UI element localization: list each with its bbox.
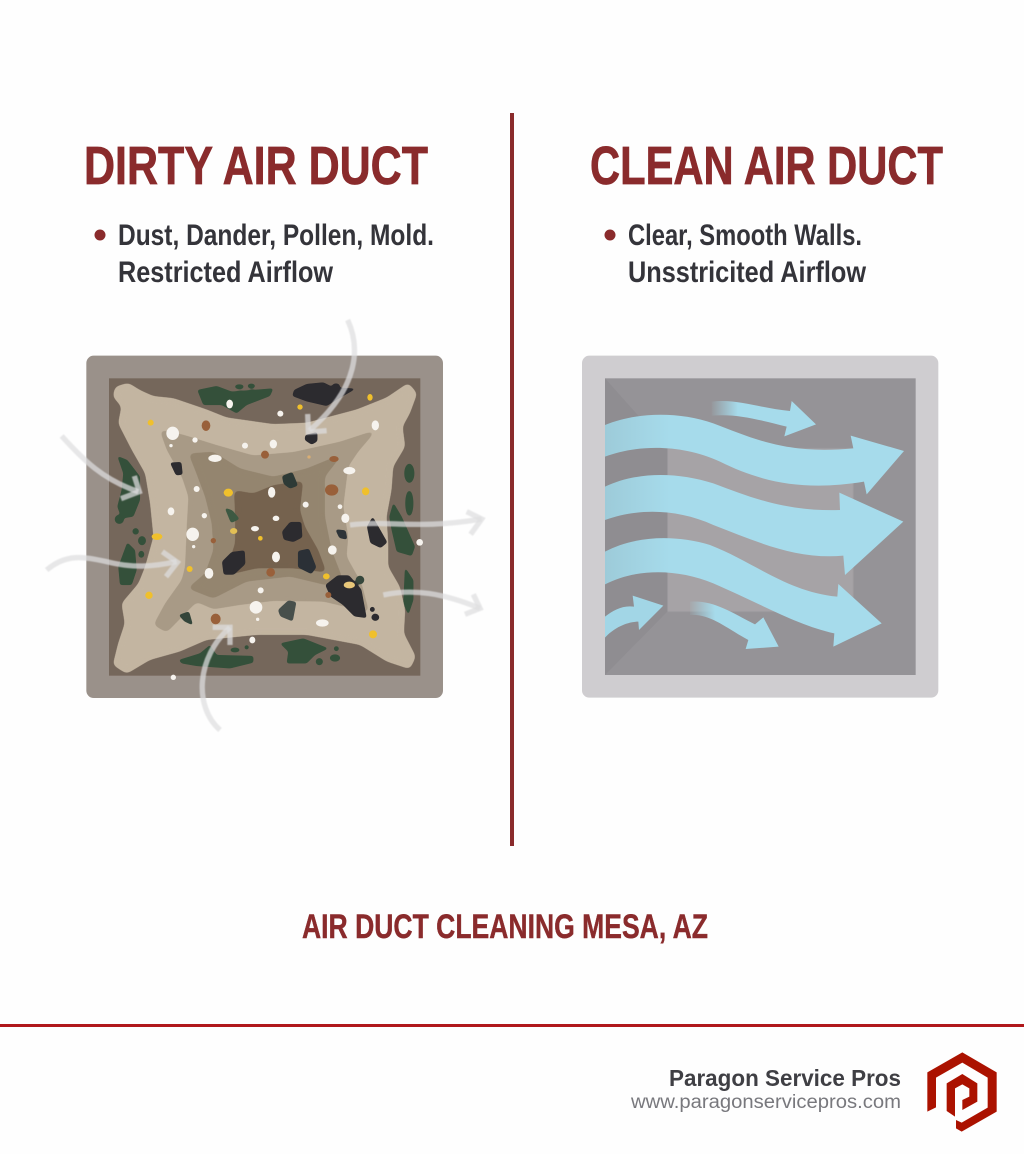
text block: clean duct description: Clear, Smooth Walls. bbox=[628, 219, 862, 252]
white specks bbox=[166, 400, 423, 680]
duct corner shading bbox=[605, 378, 667, 675]
pollen specks bbox=[145, 394, 377, 638]
dust layer: middle bbox=[153, 429, 377, 633]
dust layer: inner bbox=[187, 452, 343, 599]
airflow arrow: middle bbox=[605, 475, 903, 575]
mold patches bbox=[115, 384, 415, 668]
text block: clean duct description: Unsstricited Airflow bbox=[628, 256, 867, 289]
soot blobs bbox=[170, 382, 387, 625]
illustration: clean air duct bbox=[582, 356, 938, 698]
airflow arrow: lower bbox=[605, 538, 882, 647]
footer website: www.paragonservicepros.com bbox=[630, 1092, 901, 1113]
text block: dirty duct description: Restricted Airflow bbox=[118, 256, 334, 289]
airflow arrow: small bottom middle bbox=[690, 602, 779, 649]
footer brand name: Paragon Service Pros bbox=[669, 1065, 901, 1091]
illustration: dirty air duct bbox=[47, 320, 482, 730]
bottom title: AIR DUCT CLEANING MESA, AZ bbox=[302, 908, 708, 946]
text block: dirty duct description bbox=[94, 219, 434, 289]
dust layer: centre bbox=[224, 481, 327, 576]
divider bbox=[510, 113, 514, 846]
back wall bbox=[667, 448, 853, 612]
icon: Paragon logo bbox=[927, 1052, 997, 1132]
text block: dirty duct description: Dust, Dander, Pollen, Mold. bbox=[118, 219, 434, 252]
airflow arrow: small top bbox=[712, 401, 816, 436]
brown specks bbox=[202, 420, 339, 624]
dust layer: outer bbox=[113, 383, 417, 674]
text block: clean duct description bbox=[604, 219, 867, 289]
heading: dirty air duct: DIRTY AIR DUCT bbox=[84, 136, 428, 196]
airflow arrow: small bottom left bbox=[605, 596, 663, 638]
airflow arrows: restricted bbox=[47, 320, 482, 730]
footer rule bbox=[0, 1024, 1024, 1027]
airflow arrow: top bbox=[605, 415, 904, 494]
